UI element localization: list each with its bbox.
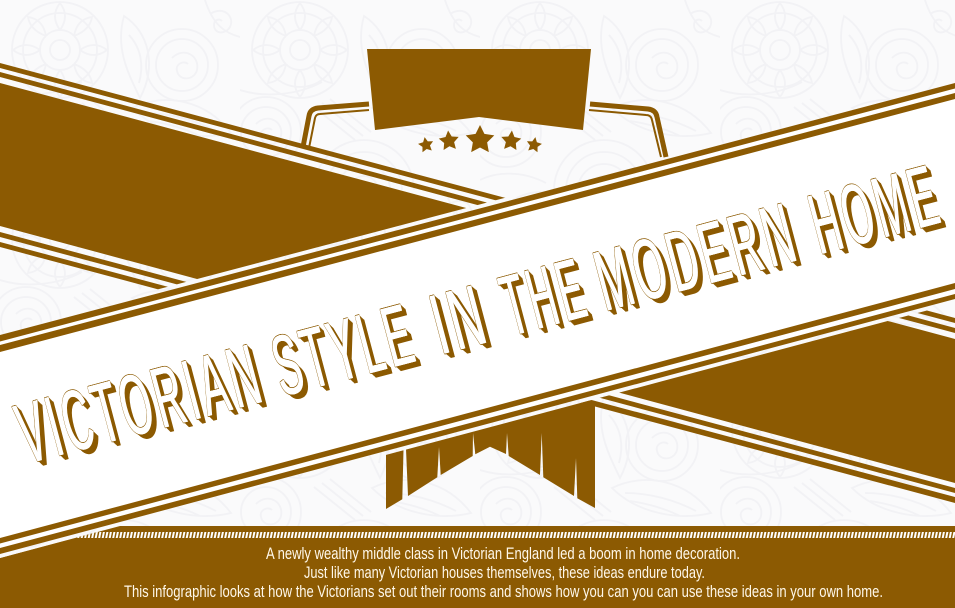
main white diagonal band with double rules (0, 83, 955, 554)
descending diagonal band with double lines (0, 63, 955, 503)
lower fringed ribbon (386, 400, 595, 509)
five star rating row (417, 125, 543, 153)
title: THE (492, 240, 598, 354)
title (7, 147, 951, 482)
rope trim strip (76, 532, 955, 538)
title: STYLE (263, 285, 426, 415)
title: VICTORIAN (7, 326, 274, 482)
ornamental frame lines beside the top ribbon (303, 104, 666, 157)
bottom brown bar (0, 526, 955, 608)
title: IN (421, 266, 499, 373)
top ribbon banner (367, 49, 591, 130)
introduction text (124, 545, 883, 601)
introduction text: A newly wealthy middle class in Victorian England led a boom in home decoration. (266, 545, 740, 563)
introduction text: Just like many Victorian houses themselves, these ideas endure today. (304, 564, 705, 582)
